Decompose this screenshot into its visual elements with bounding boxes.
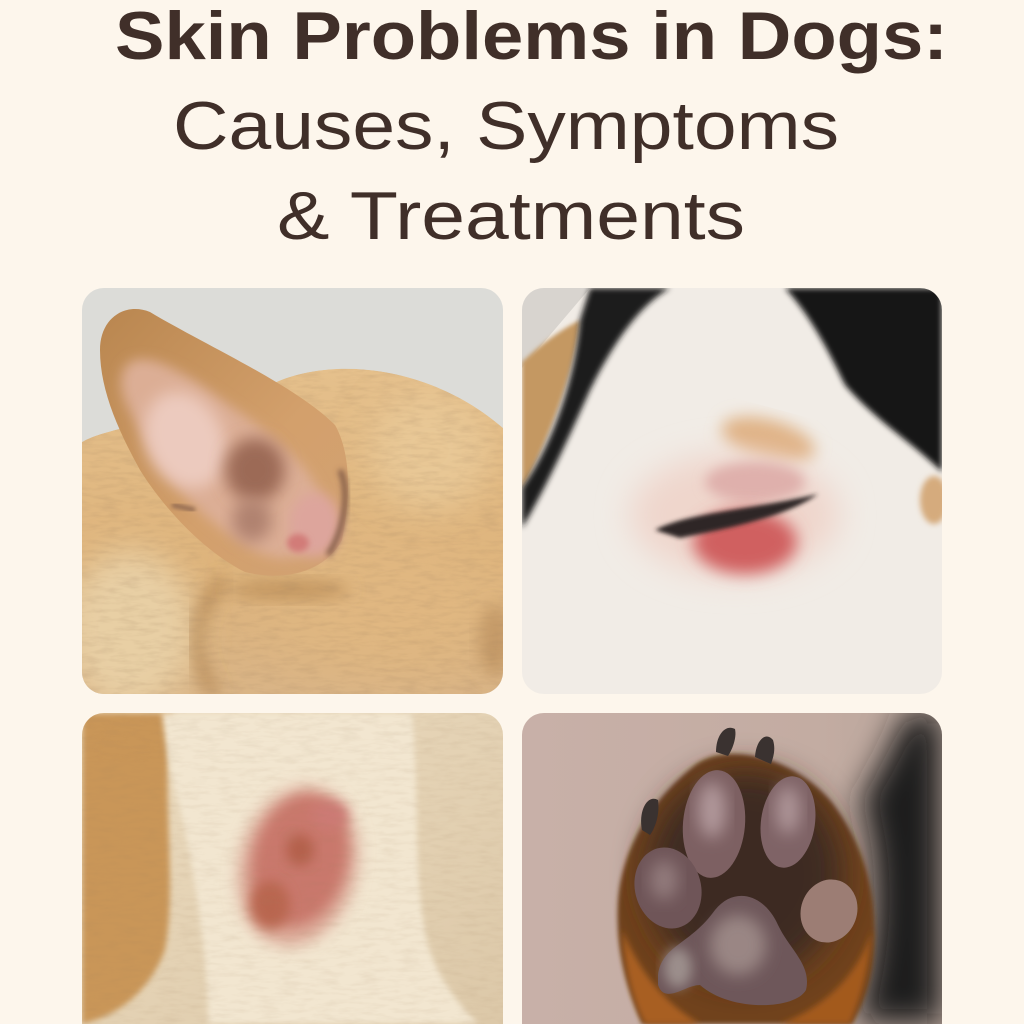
- icon: irritated eye: [630, 453, 840, 577]
- claws: [716, 728, 735, 756]
- panel: inflamed dog ear: [65, 288, 511, 710]
- title line 2: Causes, Symptoms: [173, 88, 839, 164]
- black fur left: [522, 288, 670, 528]
- black fur right: [785, 288, 942, 472]
- main pad: [658, 896, 807, 1005]
- panel: skin lesion on leg: [82, 713, 503, 1024]
- title line 3: & Treatments: [277, 178, 745, 254]
- tan brow: [716, 408, 820, 472]
- toe pads: [682, 770, 746, 878]
- dog body: [82, 368, 503, 694]
- tan leg left: [82, 713, 172, 1024]
- icon: red lesion: [230, 779, 366, 953]
- title line 1: Skin Problems in Dogs:: [115, 0, 948, 74]
- white leg: [162, 713, 478, 1024]
- icon: ear: [100, 309, 348, 576]
- panel: dog paw pads: [522, 713, 942, 1024]
- tan patch right: [920, 476, 948, 524]
- fur texture: [165, 718, 490, 1021]
- dark background right: [855, 713, 942, 1024]
- panel: irritated dog eye: [522, 288, 948, 694]
- title: [115, 0, 948, 254]
- tan fur left: [522, 320, 580, 490]
- icon: paw: [617, 728, 875, 1024]
- grey background corner: [522, 288, 590, 368]
